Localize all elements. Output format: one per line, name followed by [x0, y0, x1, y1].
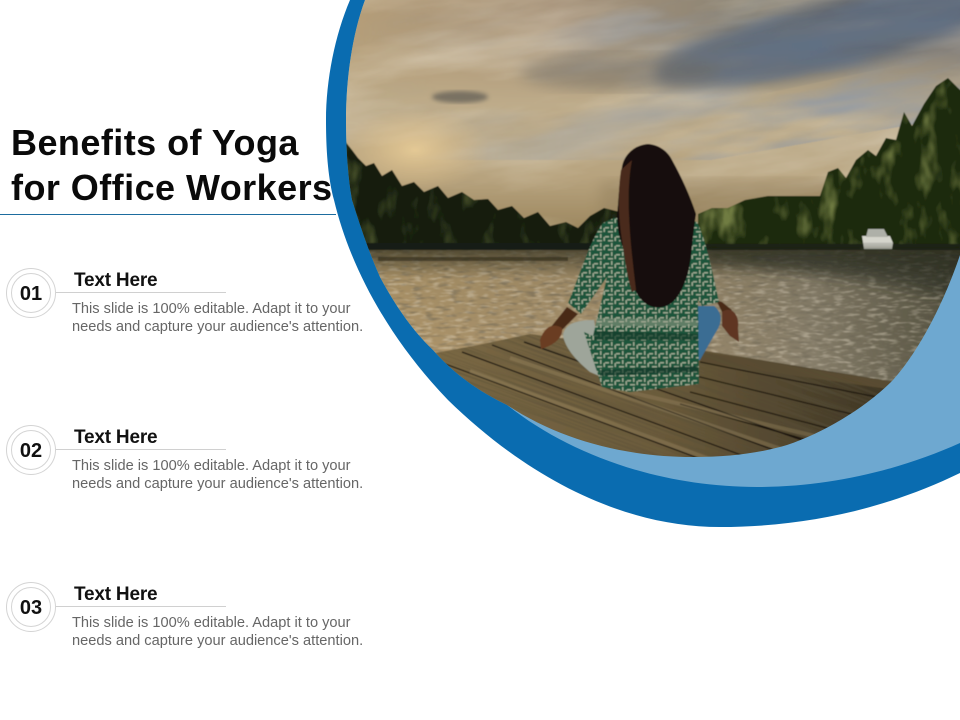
number 01: 01 — [20, 283, 42, 305]
wooden dock — [436, 334, 892, 457]
left forest — [346, 142, 618, 251]
long dark hair — [617, 144, 696, 307]
heading: Text Here — [74, 427, 157, 448]
description — [72, 458, 363, 492]
badge 02 — [6, 425, 56, 475]
title: for Office Workers — [11, 167, 333, 208]
sky with clouds — [346, 0, 960, 229]
description: needs and capture your audience's attention. — [72, 476, 363, 492]
item 01 — [6, 268, 363, 335]
right forest — [698, 75, 960, 250]
description — [72, 301, 363, 335]
description: needs and capture your audience's attention. — [72, 633, 363, 649]
description: needs and capture your audience's attention. — [72, 319, 363, 335]
connector line — [56, 606, 226, 607]
description: This slide is 100% editable. Adapt it to your — [72, 301, 351, 317]
photo: woman meditating on a dock by a lake — [346, 0, 960, 457]
circular photo graphic with blue crescents — [326, 0, 960, 527]
title: Benefits of Yoga — [11, 122, 299, 163]
lake water — [340, 248, 960, 390]
number 03: 03 — [20, 597, 42, 619]
number 02: 02 — [20, 440, 42, 462]
dark blue outer crescent — [326, 0, 960, 527]
description: This slide is 100% editable. Adapt it to your — [72, 458, 351, 474]
boat — [859, 228, 895, 250]
light blue inner crescent — [346, 0, 960, 487]
description — [72, 615, 363, 649]
connector line — [56, 292, 226, 293]
badge 01 — [6, 268, 56, 318]
heading: Text Here — [74, 584, 157, 605]
legs — [563, 306, 721, 378]
title — [11, 122, 333, 208]
description: This slide is 100% editable. Adapt it to your — [72, 615, 351, 631]
item 02 — [6, 425, 363, 492]
woman figure — [540, 144, 739, 392]
title underline — [0, 214, 336, 215]
heading: Text Here — [74, 270, 157, 291]
arms and hands — [540, 300, 739, 349]
connector line — [56, 449, 226, 450]
patterned shirt — [568, 216, 719, 392]
item 03 — [6, 582, 363, 649]
badge 03 — [6, 582, 56, 632]
